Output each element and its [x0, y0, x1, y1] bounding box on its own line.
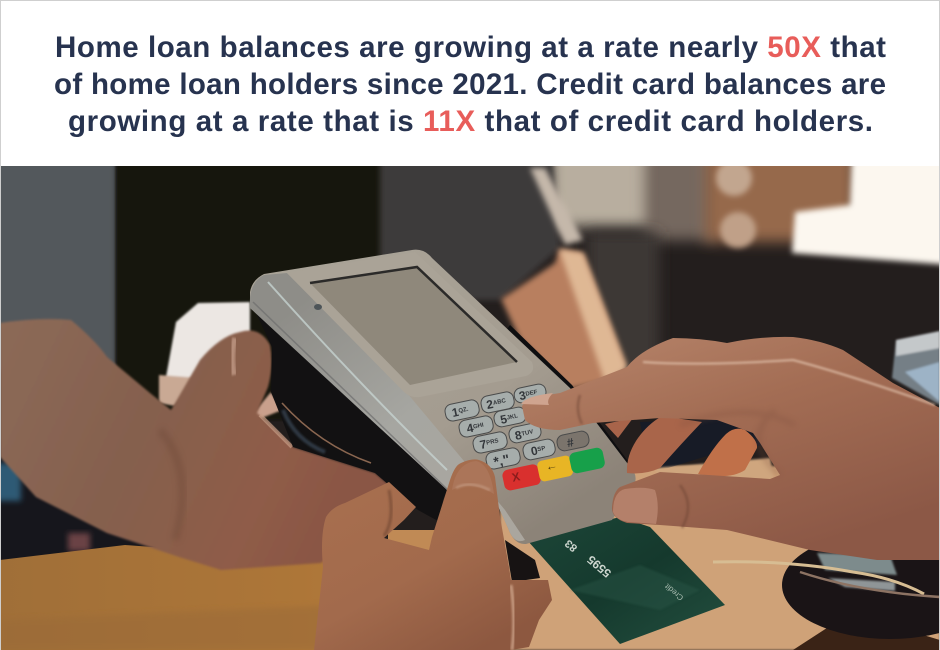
left hand holding terminal [0, 319, 395, 570]
keypad: TUV [521, 429, 534, 438]
water glass [892, 331, 940, 405]
credit card [527, 517, 725, 644]
credit card: Credit [663, 581, 685, 602]
keypad: DEF [525, 389, 538, 398]
credit card: 83 [563, 537, 580, 554]
keypad: JKL [506, 413, 519, 422]
red cancel key [501, 463, 542, 492]
keypad: 8 [514, 428, 523, 443]
terminal bevel band [250, 273, 525, 541]
indicator light [314, 304, 322, 310]
keypad: GHI [473, 422, 485, 431]
keypad: SP [537, 446, 546, 453]
terminal screen [310, 267, 517, 385]
keypad: *," [492, 451, 511, 470]
plate and spoon [713, 550, 939, 639]
keypad: 0 [530, 443, 539, 459]
heading: headline statistic text: Home loan balances are growing at a rate nearly 50X that [55, 31, 886, 64]
index fingernail [521, 393, 553, 405]
person: blurred right forearm [501, 168, 627, 390]
photo background: blurred cafe [0, 150, 940, 650]
credit card: 5595 [584, 552, 614, 580]
bottom hand thumb and fingers [314, 459, 552, 650]
keypad: PRS [486, 438, 499, 447]
paper receipt [159, 302, 282, 418]
payment terminal [250, 250, 636, 544]
terminal right edge [508, 325, 628, 463]
yellow back key [536, 455, 574, 482]
middle finger [627, 416, 702, 473]
terminal screen bezel [292, 278, 400, 386]
keypad: 3 [518, 388, 527, 403]
terminal silver casing [250, 250, 636, 544]
wooden table [0, 466, 940, 650]
thumbnail [452, 461, 494, 494]
keypad: QZ. [458, 407, 469, 415]
gap behind right hand fingers [640, 418, 765, 470]
keypad: 2 [485, 397, 495, 412]
heading: headline statistic text: of home loan holders since 2021. Credit card balances are [54, 68, 886, 101]
keypad: 4 [465, 421, 475, 436]
heading: headline statistic text [54, 31, 886, 138]
red cancel key: X [511, 469, 521, 485]
thumbnail [613, 488, 658, 524]
right hand pressing keypad [521, 337, 940, 560]
index finger and hand [522, 337, 940, 560]
knuckle highlight [643, 360, 935, 405]
terminal base under casing [505, 540, 540, 582]
keypad: # [566, 435, 575, 450]
keypad: 5 [499, 412, 508, 427]
terminal dark underside [268, 340, 446, 520]
keypad: 7 [478, 437, 488, 452]
yellow back key: ← [544, 458, 559, 474]
keypad: ABC [493, 398, 507, 407]
keypad [444, 383, 606, 492]
small finger segment behind terminal [605, 420, 632, 438]
table strip visible between fingers [656, 456, 773, 470]
person: shirt and apron [0, 160, 560, 570]
keypad: 1 [451, 405, 460, 420]
green enter key [568, 447, 606, 474]
heading: headline statistic text: growing at a rate that is 11X that of credit card holders. [68, 105, 873, 138]
ring finger [698, 429, 757, 476]
panel: photo of card payment at a terminal [0, 150, 940, 650]
